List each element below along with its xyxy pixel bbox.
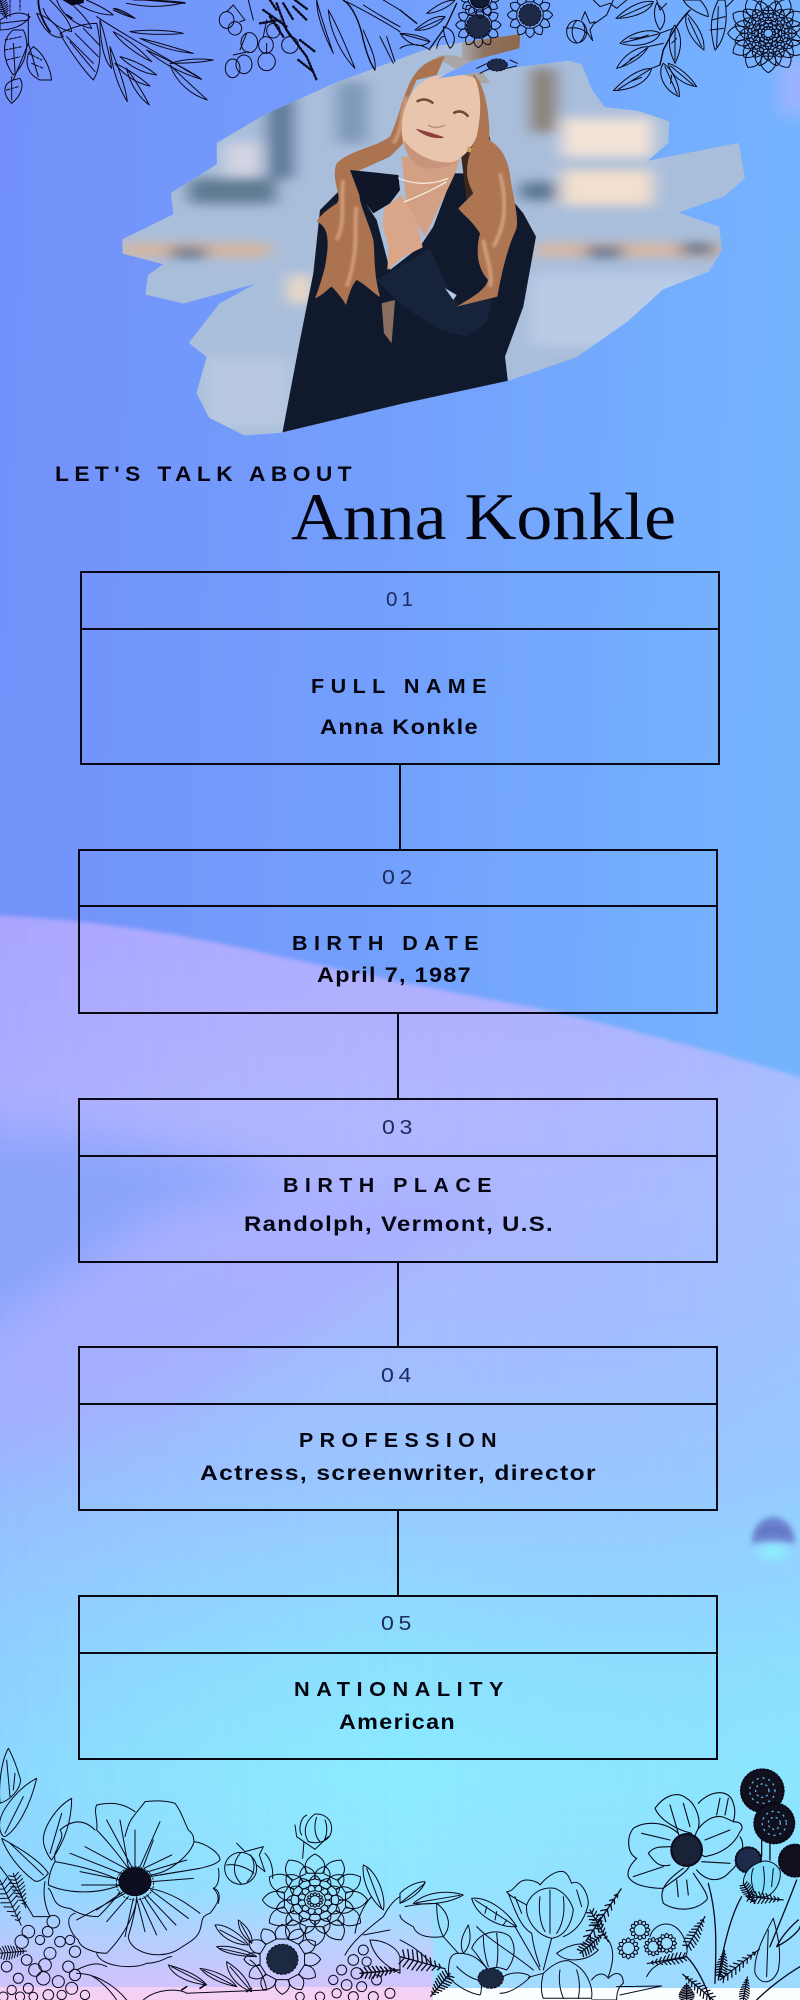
panel 5: nationality: 05 — [381, 1613, 416, 1635]
branch leaf — [345, 1865, 400, 1955]
panel 4: profession — [79, 1347, 717, 1510]
first buds — [225, 1814, 332, 1884]
panel 1: full name: Anna Konkle — [320, 716, 479, 739]
panel 3: birth place: 03 — [382, 1117, 417, 1139]
hand — [383, 195, 423, 270]
title: Anna Konkle: Anna Konkle — [291, 480, 676, 554]
grey crown — [437, 55, 490, 83]
panel 4: profession: Actress, screenwriter, director — [200, 1462, 597, 1485]
buds — [743, 1861, 780, 1982]
heading: let's talk about: LET'S TALK ABOUT — [55, 463, 357, 486]
panel 3: birth place: BIRTH PLACE — [283, 1175, 498, 1197]
mask — [350, 170, 400, 213]
chrysanthemum — [726, 0, 800, 74]
panel 1: full name: FULL NAME — [311, 676, 493, 698]
dark balls — [736, 1769, 800, 1877]
lacy leaves — [0, 0, 63, 103]
left buds and leaves — [0, 1748, 72, 1960]
woman — [282, 55, 536, 437]
connector 3 — [397, 1262, 399, 1347]
anemone — [448, 1932, 530, 1995]
panel 2: birth date — [79, 850, 717, 1013]
lower tulip — [528, 1940, 662, 2000]
branch leaves — [593, 0, 708, 97]
sunflower — [244, 1924, 321, 1994]
panel 2: birth date: 02 — [382, 867, 417, 889]
connector 1 — [399, 764, 401, 850]
right anemone — [628, 1793, 743, 1909]
connector 2 — [397, 1013, 399, 1099]
connector 4 — [397, 1510, 399, 1596]
coat — [282, 173, 536, 437]
chest — [402, 157, 460, 237]
droplet — [751, 1517, 795, 1566]
narrow leaves spray — [97, 0, 213, 105]
bottom left floral decoration — [0, 1748, 400, 2000]
brown streak at top — [462, 30, 527, 66]
fern — [359, 1964, 400, 1979]
panel 4: profession: 04 — [381, 1365, 416, 1387]
sleeve — [377, 248, 493, 337]
fern sprigs — [576, 1886, 626, 1958]
panel 2: birth date: BIRTH DATE — [292, 933, 485, 955]
panel 1: full name — [81, 572, 719, 764]
leaf right — [370, 1940, 400, 1973]
panel 3: birth place — [79, 1099, 717, 1262]
right ferns — [679, 1881, 784, 2000]
long leaves — [317, 0, 400, 70]
panel 3: birth place: Randolph, Vermont, U.S. — [244, 1213, 554, 1236]
top right floral decoration — [400, 0, 800, 97]
panel 5: nationality — [79, 1596, 717, 1759]
stems — [687, 1837, 800, 2000]
big flower — [48, 1801, 220, 1967]
berry cluster — [0, 1915, 127, 2000]
stamens — [70, 1820, 200, 1937]
hair right — [457, 73, 517, 307]
pocket glint — [445, 288, 457, 300]
hair left — [315, 56, 445, 305]
berries — [219, 0, 317, 80]
bottom right floral decoration — [398, 1769, 800, 2000]
speckled sprig — [260, 0, 317, 80]
right dark under-hair — [461, 136, 490, 200]
leaves and fern at left — [398, 1882, 470, 2000]
necklace — [398, 178, 448, 202]
eyes and mouth — [417, 100, 468, 117]
panel 5: nationality: NATIONALITY — [294, 1679, 510, 1701]
tulip — [472, 1871, 588, 1970]
small blossoms — [618, 1913, 711, 1977]
protea — [38, 0, 135, 80]
panel 5: nationality: American — [339, 1711, 456, 1734]
bottom leaves — [143, 1920, 267, 2000]
right berries — [296, 1945, 395, 2000]
dahlia — [262, 1854, 368, 1946]
panel 1: full name: 01 — [386, 589, 417, 611]
face — [402, 74, 480, 166]
inner shirt shade — [382, 300, 395, 343]
left leaves — [400, 0, 457, 50]
bud — [567, 0, 613, 43]
panel 2: birth date: April 7, 1987 — [317, 964, 472, 987]
panel 4: profession: PROFESSION — [299, 1430, 503, 1452]
photo: woman in brush stroke — [102, 29, 765, 443]
lacy cluster — [710, 0, 733, 50]
flowers with dark centres — [456, 0, 553, 73]
blurred street background — [102, 29, 765, 443]
top left floral decoration — [0, 0, 400, 105]
